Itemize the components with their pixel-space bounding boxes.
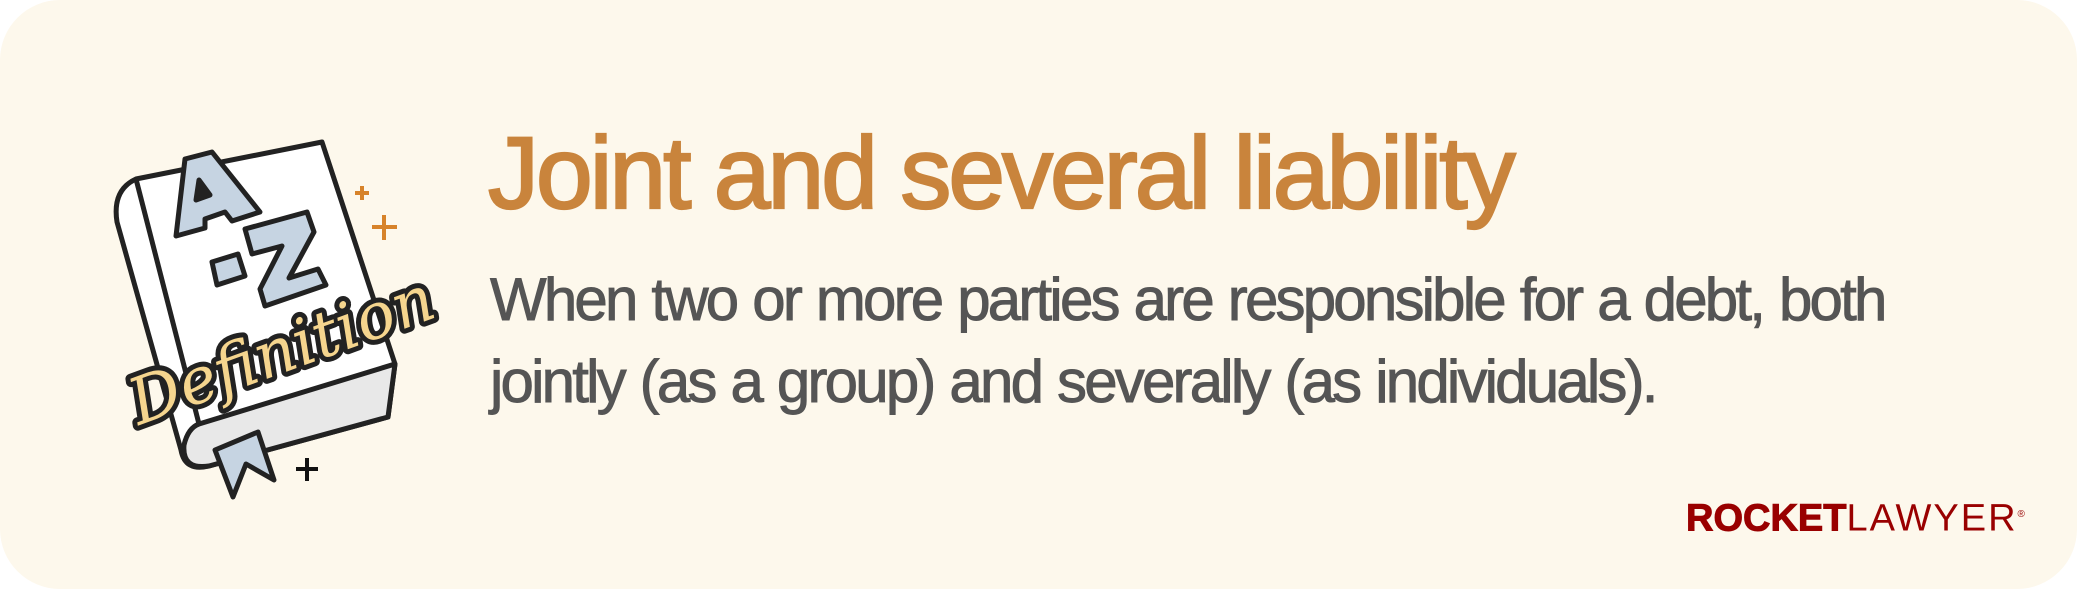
letter A: [176, 152, 260, 236]
title: Joint and several liability: [488, 116, 1513, 230]
logo: Rocket Lawyer: ROCKETLAWYER®: [1686, 498, 2025, 540]
text block: definition: When two or more parties are responsible for a debt, both: [490, 266, 1885, 333]
bookmark: [215, 432, 274, 497]
icon: sparkles: [355, 186, 397, 240]
text: Definition: Definition: [118, 262, 444, 441]
letter Z: [245, 212, 326, 306]
text block: definition: jointly (as a group) and severally (as individuals).: [490, 348, 1656, 415]
icon: dictionary book: [114, 140, 444, 500]
dash: [212, 254, 245, 285]
text block: definition: [488, 266, 1885, 415]
